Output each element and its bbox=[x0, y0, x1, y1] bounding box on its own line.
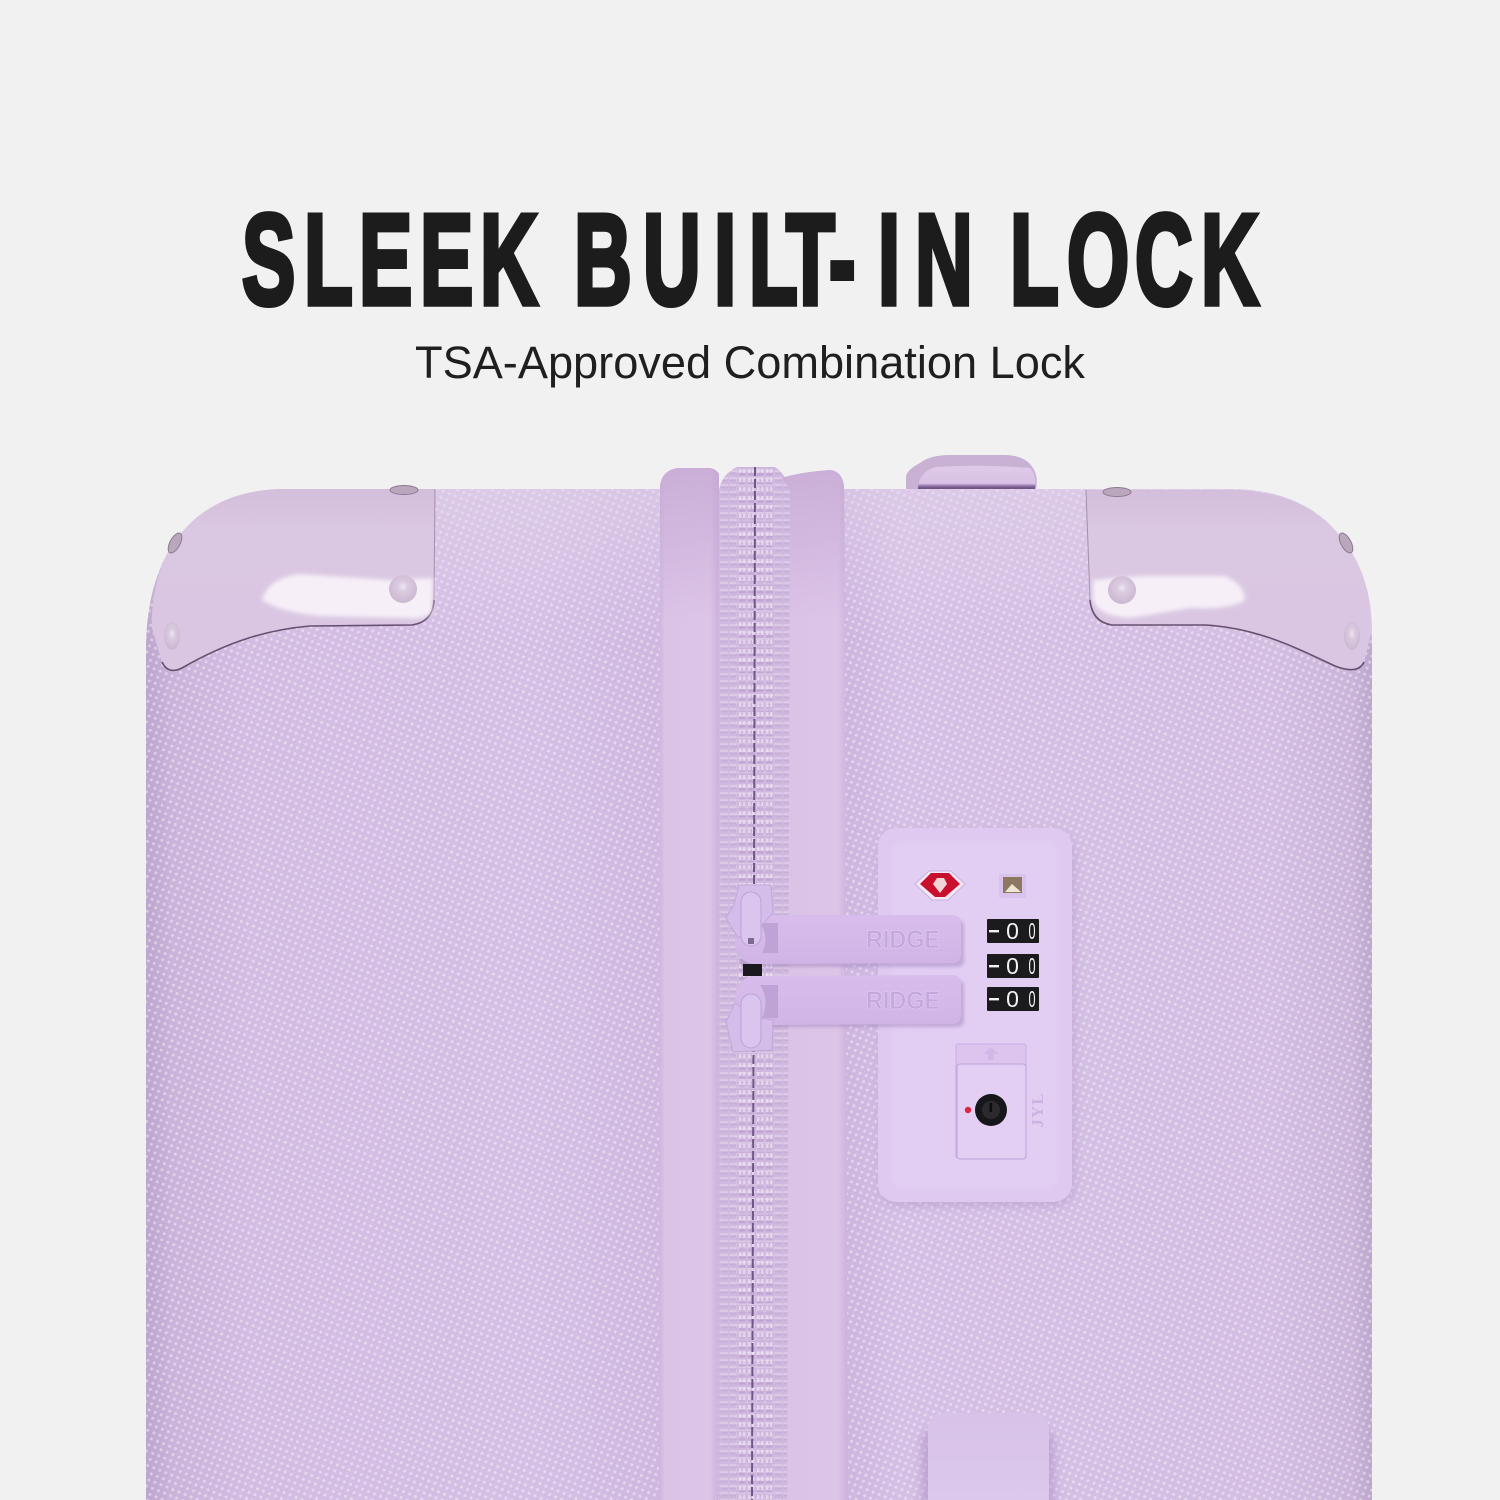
left corner guard bbox=[152, 486, 435, 670]
dial 2: 0 bbox=[1006, 953, 1019, 979]
dial 1: 0 bbox=[1028, 918, 1036, 944]
right corner guard bbox=[1086, 488, 1372, 670]
dial 3: 0 bbox=[1006, 986, 1019, 1012]
bottom handle bbox=[922, 1413, 1054, 1500]
zipper pull 2 bbox=[726, 975, 964, 1052]
combination dials bbox=[987, 918, 1039, 1012]
dial 3: 0 bbox=[1028, 986, 1036, 1012]
stud bbox=[1344, 622, 1360, 650]
stud bbox=[1336, 531, 1356, 555]
JYL mark: JYL bbox=[1028, 1092, 1047, 1128]
dial 2: 0 bbox=[1028, 953, 1036, 979]
stud bbox=[1108, 576, 1136, 604]
dial 3 bbox=[987, 986, 1039, 1012]
dial 1: 0 bbox=[1006, 918, 1019, 944]
key cover bbox=[956, 1044, 1026, 1159]
subtitle: TSA-Approved Combination Lock bbox=[415, 337, 1085, 388]
keyhole bbox=[975, 1094, 1007, 1126]
RIDGE embossed label: RIDGE bbox=[866, 987, 940, 1015]
top push button bbox=[906, 455, 1037, 489]
stud bbox=[165, 531, 185, 555]
suitcase bbox=[146, 455, 1372, 1500]
combination lock plate bbox=[878, 828, 1074, 1206]
right rib bbox=[782, 470, 848, 1500]
title: SLEEK BUILT-IN LOCK bbox=[242, 187, 1259, 332]
suitcase shell bbox=[146, 489, 1372, 1500]
zipper bbox=[717, 467, 790, 1500]
stud bbox=[164, 622, 180, 650]
reset button bbox=[999, 874, 1026, 898]
icon: TSA diamond logo bbox=[915, 871, 965, 900]
zipper pull 1 bbox=[726, 885, 964, 967]
dial 1 bbox=[987, 918, 1039, 944]
gap in zipper bbox=[743, 964, 762, 976]
stud bbox=[1103, 488, 1131, 496]
RIDGE embossed label: RIDGE bbox=[866, 926, 940, 954]
red indicator dot bbox=[965, 1107, 971, 1113]
stud bbox=[390, 486, 418, 494]
left rib bbox=[659, 468, 719, 1500]
dial 2 bbox=[987, 953, 1039, 979]
stud bbox=[389, 575, 417, 603]
